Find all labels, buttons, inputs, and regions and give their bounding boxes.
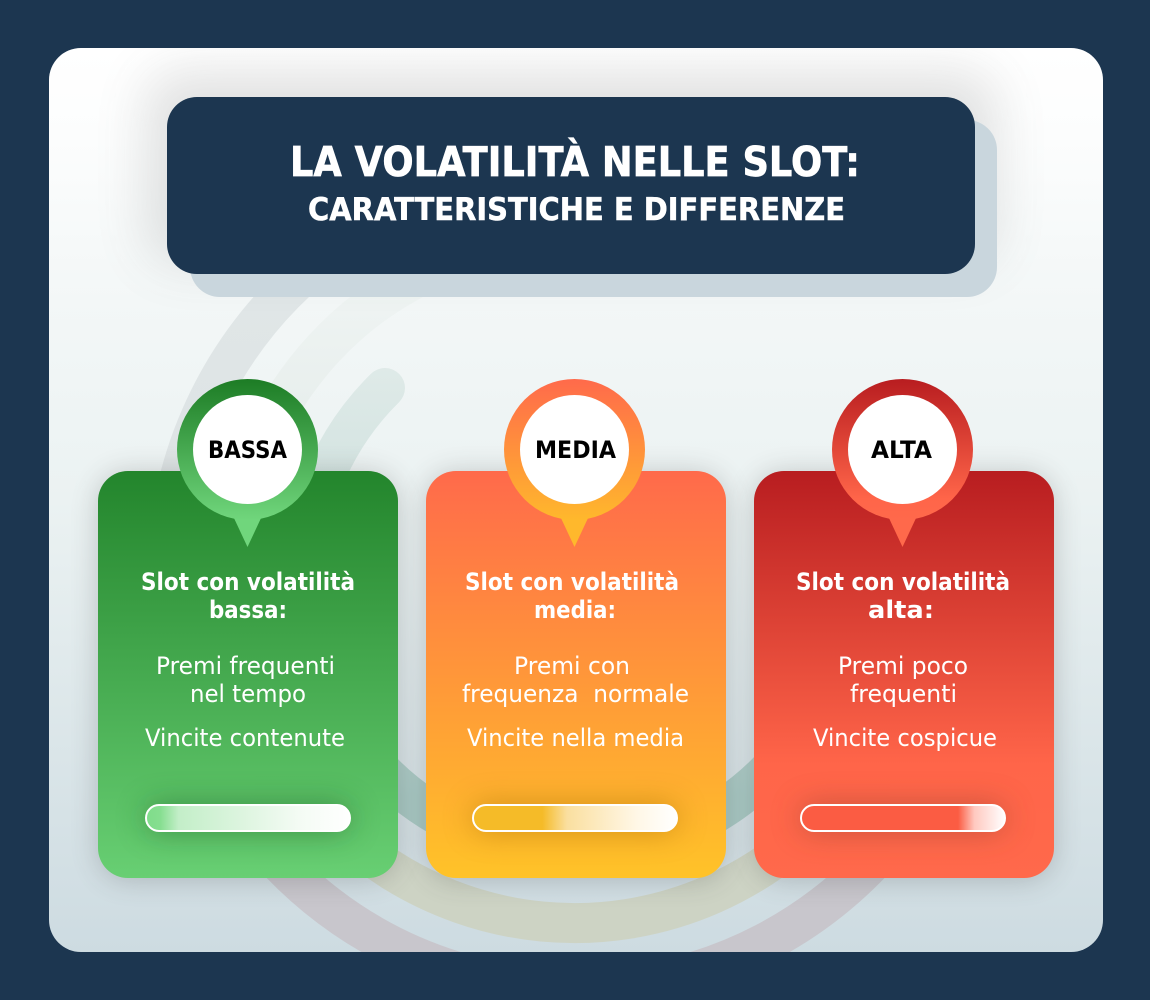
heading: media: [534, 596, 616, 624]
panel: media [426, 379, 726, 880]
heading: alta: [868, 596, 934, 624]
body text [813, 652, 997, 752]
heading: Slot con volatilità [796, 568, 1010, 596]
body text [145, 652, 345, 752]
heading: bassa: [209, 596, 287, 624]
pin badge: BASSA [208, 436, 287, 464]
panel: bassa [98, 379, 398, 880]
body text: Premi frequenti [156, 652, 335, 680]
bar shadow [145, 804, 351, 832]
body text: Vincite contenute [145, 724, 345, 752]
heading [141, 568, 355, 624]
volatility bar [146, 805, 350, 831]
body text: Premi con [514, 652, 630, 680]
heading [796, 568, 1010, 624]
pin badge: ALTA [871, 436, 932, 464]
heading [465, 568, 679, 624]
heading: Slot con volatilità [465, 568, 679, 596]
panel: alta [754, 379, 1054, 880]
body text: Vincite cospicue [813, 724, 997, 752]
body text [462, 652, 689, 752]
pin badge: MEDIA [535, 436, 616, 464]
body text: nel tempo [190, 680, 306, 708]
title line 1: LA VOLATILITÀ NELLE SLOT: [290, 138, 860, 186]
body text: Vincite nella media [467, 724, 684, 752]
pin badge [504, 379, 645, 547]
pin badge [832, 379, 973, 547]
body text: Premi poco [838, 652, 968, 680]
volatility bar [473, 805, 677, 831]
decorative concentric arcs [161, 297, 884, 952]
title banner [147, 72, 997, 297]
heading: Slot con volatilità [141, 568, 355, 596]
bar shadow [800, 804, 1006, 832]
bar shadow [472, 804, 678, 832]
pin badge [177, 379, 318, 547]
body text: frequenza normale [462, 680, 689, 708]
body text: frequenti [850, 680, 957, 708]
volatility bar [801, 805, 1005, 831]
title line 2: CARATTERISTICHE E DIFFERENZE [308, 192, 845, 228]
